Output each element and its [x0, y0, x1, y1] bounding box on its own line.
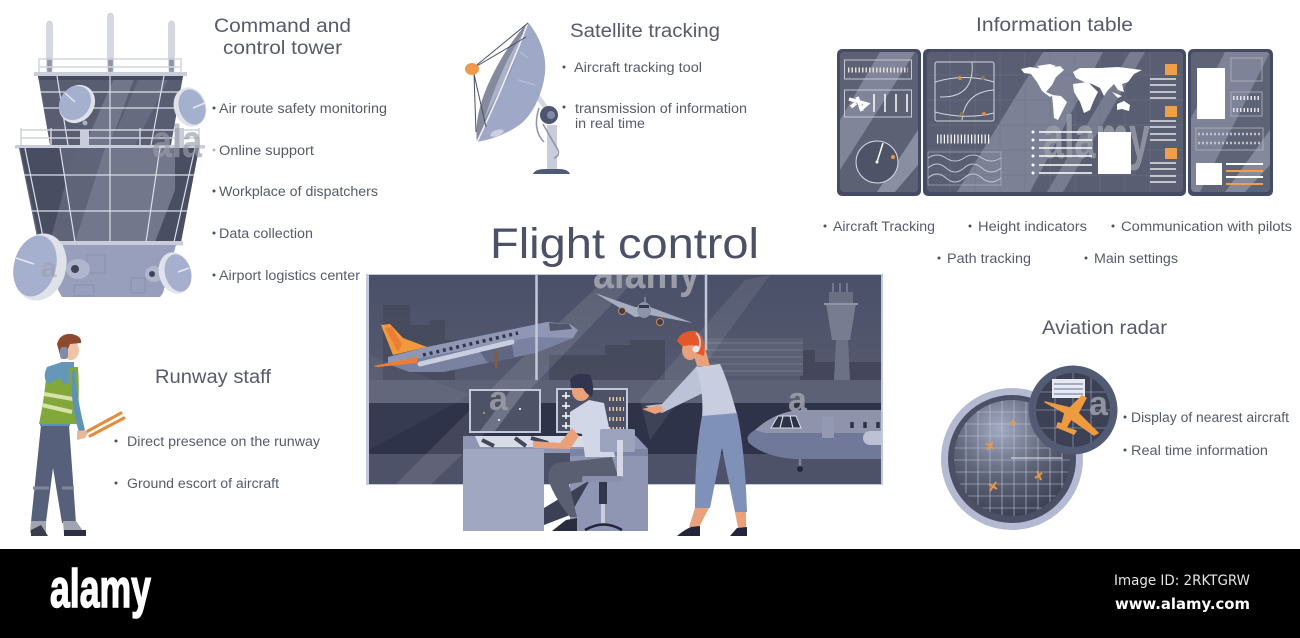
antennas: [46, 13, 174, 72]
legs and shoes: [689, 508, 709, 527]
list: satellite functions: Aircraft tracking tool: [574, 60, 702, 75]
watermarks: ala: [152, 115, 202, 167]
list: satellite functions: [562, 60, 747, 131]
list: tower functions: [212, 101, 387, 283]
watermarks: a: [489, 380, 509, 418]
illustration: information table: [837, 49, 1273, 196]
radar blips: [986, 420, 1042, 491]
list: runway staff functions: Ground escort of aircraft: [127, 476, 279, 491]
illustration: runway worker: [30, 334, 124, 536]
lower cab: [19, 148, 199, 242]
plane: parked: [747, 410, 893, 472]
watermark on window: alamy: [593, 249, 700, 298]
list: tower functions: Airport logistics center: [219, 268, 361, 283]
worker vest: [39, 367, 79, 424]
site address: www.alamy.com: [1115, 595, 1250, 613]
heading: information table: Information table: [976, 15, 1133, 36]
world map: [1021, 64, 1142, 120]
pointing arm: [645, 366, 720, 413]
illustration: control room window: [366, 274, 883, 485]
operator: [533, 374, 635, 531]
operator legs: [548, 457, 618, 517]
upper cab: [38, 76, 183, 145]
upper railing: [39, 58, 181, 73]
list: satellite functions: transmission of information: [575, 101, 747, 116]
panel: right screen: [1188, 49, 1273, 196]
torso: [696, 364, 737, 418]
orange status blocks: [1165, 64, 1177, 75]
illustration: satellite dish: [465, 22, 570, 174]
list: radar functions: Real time information: [1131, 443, 1268, 458]
list: radar functions: Display of nearest aircraft: [1131, 410, 1289, 425]
radar: main scope: [941, 388, 1083, 530]
marshalling wands: [88, 413, 124, 436]
list: information table functions: Communication with pilots: [1121, 219, 1292, 234]
list: information table functions: Height indicators: [978, 219, 1087, 234]
list: information table functions: Path tracking: [947, 251, 1031, 266]
tower base: [58, 245, 176, 297]
illustration: control desk and monitors: [463, 374, 648, 531]
list: information table functions: [824, 219, 1292, 266]
monitor: flight board: [556, 388, 628, 433]
heading: command and control tower: [214, 16, 351, 59]
illustration: aviation radar: [941, 366, 1118, 530]
title: Flight control: [490, 220, 759, 268]
window frames: [536, 274, 706, 380]
watermark on table: alamy: [1043, 104, 1150, 171]
list: tower functions: Workplace of dispatchers: [219, 184, 378, 199]
list: runway staff functions: Direct presence on the runway: [127, 434, 320, 449]
heading: command and control tower: Command and: [214, 16, 351, 37]
worker head: [63, 340, 79, 360]
distant tower: [824, 283, 858, 380]
watermarks: a: [41, 252, 57, 283]
dish bowl: [476, 22, 545, 142]
list: runway staff functions: [114, 434, 320, 491]
data list: [1032, 130, 1034, 174]
list: satellite functions: in real time: [575, 116, 645, 131]
illustration: command and control tower: [6, 13, 211, 307]
footer bar: [0, 549, 1300, 638]
dish: lower right: [145, 249, 196, 297]
watermarks: [41, 115, 1109, 423]
lower railing: [21, 128, 199, 146]
dispatcher woman: [642, 331, 747, 536]
heading: runway staff: Runway staff: [155, 367, 272, 388]
feed horn and struts: [472, 23, 528, 132]
panel: center screen: [923, 49, 1186, 196]
dish: upper left: [52, 78, 102, 130]
desk body: [463, 436, 648, 531]
dish: upper right: [169, 83, 211, 131]
heading: satellite tracking: Satellite tracking: [570, 21, 720, 42]
watermarks: a: [788, 381, 808, 419]
list: radar functions: [1124, 410, 1289, 458]
city silhouette: [383, 305, 881, 385]
worker trousers: [31, 425, 76, 523]
panel: left screen: [837, 49, 921, 196]
window reflections: [395, 275, 640, 485]
route map: [935, 62, 994, 121]
list: information table functions: Main settings: [1094, 251, 1178, 266]
worker shoes: [30, 521, 46, 533]
list: tower functions: Air route safety monitoring: [219, 101, 387, 116]
list: information table functions: Aircraft Tracking: [833, 219, 935, 234]
operator head: [572, 381, 590, 401]
monitor: radar map: [469, 389, 541, 433]
image id: Image ID: 2RKTGRW: [1114, 573, 1250, 589]
dish stand: [547, 125, 557, 170]
heading: command and control tower: control tower: [223, 38, 343, 59]
wave chart: [928, 152, 1001, 185]
worker arms: [45, 362, 70, 385]
footer logo: alamy: [50, 559, 151, 619]
plane: taking off: [373, 322, 578, 372]
list: tower functions: Data collection: [219, 226, 313, 241]
radar: magnified plane: [1028, 366, 1118, 454]
watermarks: a: [1089, 385, 1109, 423]
dish: lower left: [6, 227, 90, 307]
plane: distant front view: [595, 293, 693, 326]
list: tower functions: Online support: [219, 143, 314, 158]
trousers: [695, 413, 747, 512]
waveform: [937, 134, 991, 144]
chair: [600, 429, 635, 452]
headset: [696, 333, 700, 349]
heading: aviation radar: Aviation radar: [1042, 318, 1168, 339]
runway bands: [369, 380, 881, 404]
operator shirt: [570, 400, 615, 457]
neck and head: [693, 348, 710, 366]
